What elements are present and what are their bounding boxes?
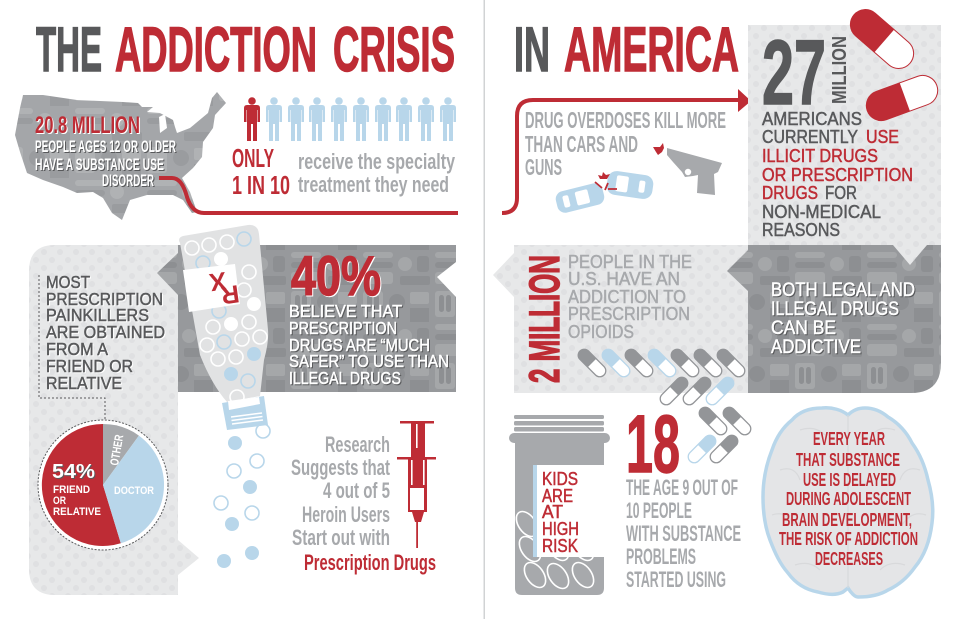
red connector line left: [159, 178, 458, 213]
panel: us map with 20.8 million: 20.8 MILLION: [35, 112, 140, 139]
panel: dark banner 40 percent: 40%: [291, 244, 381, 307]
panel: dark banner 40 percent: BELIEVE THAT: [289, 301, 402, 321]
text: every year: EVERY YEAR: [813, 429, 885, 449]
title: the addiction crisis: CRISIS: [333, 15, 455, 85]
pie chart: painkiller sources: [38, 420, 168, 550]
text: research suggests: 4 out of 5: [323, 478, 390, 503]
text: 18 the age: PROBLEMS: [626, 544, 696, 569]
icon: crashed cars: [554, 170, 654, 214]
pie chart: painkiller sources: DOCTOR: [114, 485, 154, 497]
text: 18 the age: STARTED USING: [626, 567, 726, 592]
panel: 27 million: NON-MEDICAL: [762, 201, 881, 222]
panel: us map with 20.8 million: HAVE A SUBSTANCE USE: [35, 156, 164, 174]
panel: dark banner 40 percent: PRESCRIPTION: [289, 318, 397, 338]
text: only 1 in 10 receive treatment: 1 IN 10: [232, 170, 290, 200]
text: research suggests: Suggests that: [291, 455, 390, 480]
text: kids are at high risk: HIGH: [542, 519, 579, 539]
panel: dark banner 40 percent: ILLEGAL DRUGS: [289, 368, 401, 388]
text: every year: DECREASES: [815, 549, 883, 569]
text: every year: [779, 429, 918, 569]
panel: both legal and illegal drugs: CAN BE: [771, 318, 836, 339]
panel: 2 million opioids: PRESCRIPTION: [568, 304, 690, 324]
text: drug overdoses: THAN CARS AND: [525, 131, 638, 157]
title: the addiction crisis: ADDICTION: [115, 15, 317, 85]
panel: 2 million opioids: OPIOIDS: [568, 322, 634, 342]
text: only 1 in 10 receive treatment: ONLY: [232, 143, 274, 173]
falling pills: [214, 424, 270, 568]
panel: both legal and illegal drugs: ILLEGAL DRUGS: [771, 299, 899, 320]
bottle cap: [222, 396, 268, 430]
text: most prescription painkillers: [46, 272, 165, 393]
map of the united states: [15, 92, 226, 220]
panel: 27 million: ILLICIT DRUGS: [762, 145, 878, 166]
rx label: X: [207, 266, 228, 296]
pie chart: painkiller sources: OR: [53, 495, 66, 507]
text: kids are at high risk: AT: [542, 502, 563, 522]
panel: 27 million: DRUGS: [762, 182, 818, 203]
icon: gun: [653, 143, 722, 195]
text: 18 the age: 18: [626, 399, 680, 490]
panel: dark banner 40 percent: DRUGS ARE “MUCH: [289, 335, 430, 355]
text: drug overdoses: [525, 107, 726, 180]
panel: 2 million opioids: 2 MILLION: [521, 255, 569, 383]
panel: 27 million: OR PRESCRIPTION: [762, 164, 913, 185]
icon: pill jar with kids label: [509, 415, 610, 595]
panel: 27 million: USE: [866, 126, 899, 147]
text: most prescription painkillers: FRIEND OR: [46, 356, 133, 376]
title: in america: IN: [514, 15, 550, 85]
title: the addiction crisis: THE: [36, 15, 102, 85]
text: most prescription painkillers: ARE OBTAINED: [46, 322, 165, 342]
panel: 27 million: MILLION: [829, 36, 851, 104]
slice: friend or relative 54%: [42, 424, 121, 546]
text: 18 the age: THE AGE 9 OUT OF: [626, 475, 738, 500]
panel: 27 million: [748, 3, 942, 270]
pie chart: painkiller sources: 54%: [52, 461, 95, 483]
text: research suggests: [291, 432, 436, 575]
text: every year: THAT SUBSTANCE: [796, 450, 900, 470]
title: in america: AMERICA: [564, 15, 739, 85]
icon row: 1 in 10 people: [244, 97, 456, 141]
panel: 2 million opioids: U.S. HAVE AN: [568, 269, 680, 289]
panel: both legal and illegal drugs: BOTH LEGAL AND: [771, 280, 915, 301]
text: most prescription painkillers: PRESCRIPTION: [46, 289, 163, 309]
text: kids are at high risk: RISK: [542, 536, 578, 556]
text: kids are at high risk: [542, 469, 579, 556]
pie chart: painkiller sources: FRIEND: [53, 484, 90, 496]
text: kids are at high risk: KIDS: [542, 469, 578, 489]
text: most prescription painkillers: RELATIVE: [46, 373, 122, 393]
text: research suggests: Research: [325, 432, 390, 457]
pie chart: painkiller sources: RELATIVE: [53, 506, 101, 518]
text: research suggests: Heroin Users: [302, 502, 390, 527]
icon: spilled pill bottle: [179, 225, 270, 568]
page divider: [484, 0, 485, 619]
text: 18 the age: 10 PEOPLE: [626, 498, 692, 523]
panel: us map with 20.8 million: DISORDER: [102, 172, 154, 190]
icon: capsule bottom: [862, 71, 942, 125]
text: most prescription painkillers: FROM A: [46, 339, 108, 359]
panel: 27 million: REASONS: [762, 219, 840, 240]
panel: 2 million opioids: [493, 245, 748, 393]
rx label: [183, 264, 241, 312]
text: every year: USE IS DELAYED: [803, 470, 896, 490]
dotted leader line: [39, 275, 105, 421]
slice: doctor: [103, 436, 164, 543]
panel: light gray painkillers panel: [29, 245, 199, 595]
slice: other: [103, 424, 139, 485]
panel: 27 million: AMERICANS: [762, 108, 862, 129]
text: most prescription painkillers: PAINKILLERS: [46, 305, 149, 325]
text: kids are at high risk: ARE: [542, 486, 573, 506]
text: only 1 in 10 receive treatment: treatment they need: [298, 172, 449, 197]
icon: capsule top: [844, 3, 920, 75]
panel: dark banner 40 percent: [157, 244, 456, 392]
text: most prescription painkillers: MOST: [46, 272, 90, 292]
pie chart: painkiller sources: OTHER: [107, 433, 126, 467]
title: in america: [514, 15, 739, 85]
panel: both legal and illegal drugs: [727, 245, 941, 393]
panel: both legal and illegal drugs: ADDICTIVE: [771, 337, 861, 358]
panel: us map with 20.8 million: PEOPLE AGES 12 OR OLDER: [35, 138, 176, 156]
text: research suggests: Prescription Drugs: [304, 550, 436, 575]
arrow: red line to 27 million: [502, 89, 751, 213]
text: drug overdoses: DRUG OVERDOSES KILL MORE: [525, 107, 726, 133]
rx label: R: [219, 279, 241, 309]
text: only 1 in 10 receive treatment: [232, 143, 456, 200]
text: 18 the age: WITH SUBSTANCE: [626, 521, 741, 546]
panel: 2 million opioids: PEOPLE IN THE: [568, 252, 692, 272]
panel: 27 million: 27: [762, 22, 826, 124]
panel: 2 million opioids: ADDICTION TO: [568, 287, 686, 307]
panel: 27 million: FOR: [825, 182, 857, 203]
panel: 27 million: CURRENTLY: [762, 126, 858, 147]
text: drug overdoses: GUNS: [525, 154, 562, 180]
panel: us map with 20.8 million: [15, 92, 226, 220]
panel: dark banner 40 percent: SAFER” TO USE THAN: [289, 351, 449, 371]
text: research suggests: Start out with: [292, 525, 390, 550]
text: only 1 in 10 receive treatment: receive the specialty: [298, 149, 456, 174]
icons: scattered small capsules: [576, 347, 753, 465]
text: 18 the age: [626, 399, 741, 592]
icon: syringe: [397, 421, 436, 548]
icon: brain with text: [763, 408, 933, 597]
